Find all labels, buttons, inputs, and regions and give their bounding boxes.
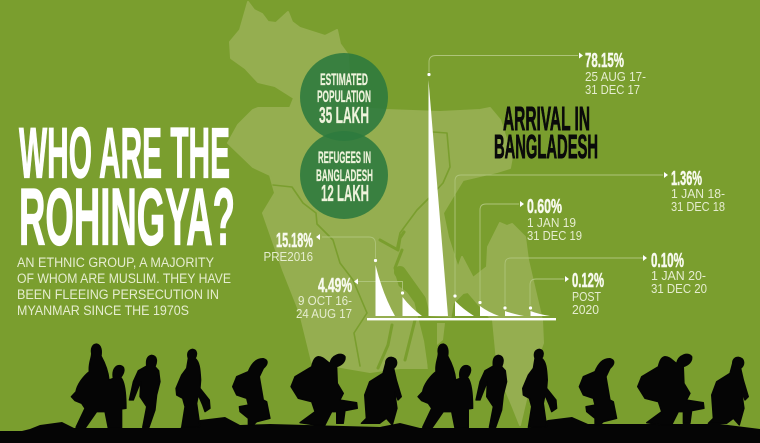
label: 0.10%: 0.10%	[651, 249, 684, 272]
label: 0.12%: 0.12%	[572, 269, 604, 292]
label: 78.15%: 78.15%	[585, 49, 624, 72]
title	[19, 114, 235, 262]
label: 1.36%: 31 DEC 18	[671, 199, 725, 214]
label: 1.36%: 1 JAN 18-	[671, 186, 725, 201]
label: 4.49%: 9 OCT 16-	[298, 293, 352, 308]
label: 78.15%: 25 AUG 17-	[585, 69, 646, 84]
text: WHO ARE THE	[19, 114, 230, 194]
label: 0.60%: 1 JAN 19	[527, 215, 576, 230]
walkers first row	[71, 344, 357, 428]
label: 0.10%: 1 JAN 20-	[651, 268, 706, 283]
silhouettes of refugees walking	[0, 344, 760, 443]
bar chart: arrivals by period	[367, 73, 556, 320]
circle: estimated population: 35 LAKH	[319, 102, 369, 128]
circle: refugees in Bangladesh: REFUGEES IN	[318, 148, 371, 167]
circle: estimated population: ESTIMATED	[320, 70, 368, 89]
rivers and estuaries	[273, 132, 450, 368]
circle: estimated population	[300, 53, 388, 141]
label: 1.36%: 1.36%	[671, 167, 702, 190]
label: 15.18%: 15.18%	[276, 229, 313, 252]
circle: refugees in Bangladesh: 12 LAKH	[321, 180, 369, 206]
label: 0.12%: POST	[572, 289, 601, 304]
walkers second row	[418, 344, 704, 428]
lone walker repeat	[708, 357, 748, 425]
label: 1.36%	[671, 167, 725, 214]
leader lines and arrows	[316, 52, 668, 305]
label: 78.15%	[585, 49, 646, 97]
label: 4.49%	[296, 274, 352, 321]
intro text	[17, 255, 231, 318]
label: 78.15%: 31 DEC 17	[585, 82, 640, 97]
label: 15.18%	[264, 229, 313, 264]
circle: refugees in Bangladesh: BANGLADESH	[316, 166, 373, 185]
label: 0.12%: 2020	[572, 302, 599, 317]
circle: refugees in Bangladesh	[300, 131, 388, 219]
text: ROHINGYA?	[19, 172, 235, 262]
label: 0.60%: 31 DEC 19	[527, 228, 582, 243]
heading: arrival in Bangladesh: ARRIVAL IN	[503, 101, 590, 138]
intro text: MYANMAR SINCE THE 1970S	[17, 303, 189, 318]
label: 4.49%: 4.49%	[318, 274, 352, 297]
lone walker	[361, 357, 401, 425]
map of Bangladesh and surroundings	[228, 2, 543, 425]
intro text: AN ETHNIC GROUP, A MAJORITY	[17, 255, 214, 270]
label: 4.49%: 24 AUG 17	[296, 306, 352, 321]
intro text: OF WHOM ARE MUSLIM. THEY HAVE	[17, 271, 231, 286]
label: 0.60%: 0.60%	[527, 195, 562, 218]
intro text: BEEN FLEEING PERSECUTION IN	[17, 287, 219, 302]
label: 0.60%	[527, 195, 582, 243]
label: 15.18%: PRE2016	[264, 249, 313, 264]
ground	[0, 417, 760, 443]
label: 0.10%: 31 DEC 20	[651, 281, 707, 296]
label: 0.12%	[572, 269, 604, 317]
label: 0.10%	[651, 249, 707, 296]
text: BANGLADESH	[494, 129, 598, 166]
heading: arrival in Bangladesh	[494, 101, 598, 166]
circle: estimated population: POPULATION	[317, 87, 371, 106]
